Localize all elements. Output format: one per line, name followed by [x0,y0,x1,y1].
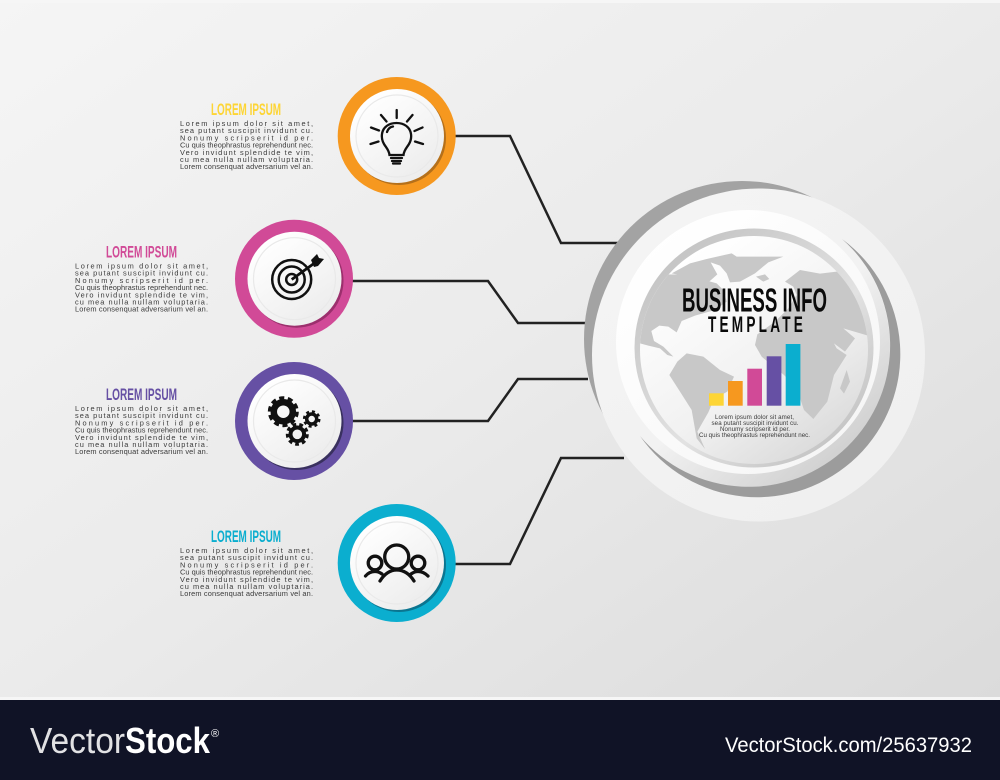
step 1 badge: orange [338,77,456,195]
step 3 badge: purple [235,362,353,480]
body: Nonumy scripserit id per. [75,418,208,427]
connector lines [352,136,624,564]
body: Lorem ipsum dolor sit amet, [180,546,313,555]
body: Nonumy scripserit id per. [180,133,313,142]
heading: LOREM IPSUM [211,527,281,546]
step 2 badge: magenta [235,220,353,338]
central caption [699,414,810,439]
central caption: sea putant suscipit invidunt cu. [712,420,799,427]
body: Cu quis theophrastus reprehendunt nec. [180,568,313,577]
body: Lorem ipsum dolor sit amet, [75,262,208,270]
body [75,262,208,314]
body [75,404,208,456]
body: Lorem consenquat adversarium vel an. [75,305,208,314]
body: Vero invidunt splendide te vim, [75,290,208,299]
footer id: VectorStock.com/25637932 [725,734,972,757]
body: cu mea nulla nullam voluptaria. [75,298,208,306]
body [180,119,313,171]
step 4 text [180,527,313,598]
step 2 text [75,242,208,314]
title: BUSINESS INFO [682,282,827,318]
body: Cu quis theophrastus reprehendunt nec. [75,426,208,435]
body: Cu quis theophrastus reprehendunt nec. [180,141,313,150]
body: Nonumy scripserit id per. [75,276,208,285]
body: Lorem consenquat adversarium vel an. [180,589,313,598]
world map [640,254,867,448]
body: cu mea nulla nullam voluptaria. [75,440,208,449]
body: Vero invidunt splendide te vim, [180,148,313,157]
step 1 text [180,100,313,171]
body: Cu quis theophrastus reprehendunt nec. [75,283,208,292]
heading: LOREM IPSUM [211,100,281,119]
body: sea putant suscipit invidunt cu. [180,553,313,562]
icon: gears [270,398,319,444]
body: cu mea nulla nullam voluptaria. [180,582,313,591]
body: Lorem consenquat adversarium vel an. [75,447,208,456]
footer logo [30,720,219,761]
body [180,546,313,598]
footer logo: Vector [30,720,125,761]
body: Vero invidunt splendide te vim, [180,575,313,584]
body: sea putant suscipit invidunt cu. [75,269,208,278]
central caption: Nonumy scripserit id per. [720,426,790,433]
central caption: Cu quis theophrastus reprehendunt nec. [699,432,810,439]
body: Vero invidunt splendide te vim, [75,433,208,442]
footer logo: Stock [125,720,211,761]
icon: light bulb [370,110,423,164]
body: Lorem consenquat adversarium vel an. [180,162,313,171]
heading: LOREM IPSUM [106,385,177,404]
body: Nonumy scripserit id per. [180,560,313,569]
central caption: Lorem ipsum dolor sit amet, [715,414,794,421]
body: sea putant suscipit invidunt cu. [180,126,313,135]
icon: people [366,545,428,581]
title: TEMPLATE [708,312,803,337]
footer logo: ® [211,728,219,740]
body: cu mea nulla nullam voluptaria. [180,155,313,164]
body: sea putant suscipit invidunt cu. [75,411,208,420]
step 4 badge: teal [338,504,456,622]
icon: target [272,254,324,299]
title [682,282,827,337]
body: Lorem ipsum dolor sit amet, [180,119,313,128]
body: Lorem ipsum dolor sit amet, [75,404,208,413]
step 3 text [75,385,208,456]
bar chart [709,344,800,406]
footer bar [0,700,1000,780]
heading: LOREM IPSUM [106,242,177,261]
central globe badge [584,181,925,522]
